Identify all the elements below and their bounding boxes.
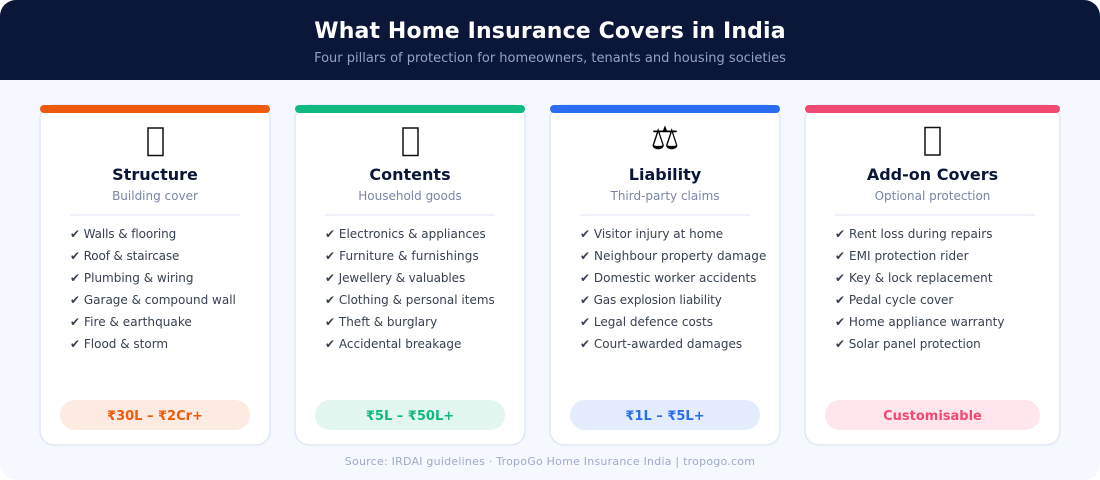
list: structure items: ✔ Garage & compound wall — [70, 293, 236, 307]
list: add-on items: ✔ Home appliance warranty — [835, 315, 1004, 329]
subheading: Third-party claims: Third-party claims — [610, 189, 720, 203]
badge: liability range: ₹1L – ₹5L+ — [625, 409, 705, 424]
list: contents items: ✔ Clothing & personal items — [325, 293, 495, 307]
list: contents items — [325, 227, 495, 351]
list: structure items: ✔ Walls & flooring — [70, 227, 176, 241]
panel: Liability — [549, 104, 781, 446]
subheading: Optional protection: Optional protection — [875, 189, 990, 203]
panel: Add-on Covers — [804, 104, 1061, 446]
list: liability items — [580, 227, 766, 351]
badge: contents range — [315, 400, 505, 430]
list: structure items: ✔ Roof & staircase — [70, 249, 179, 263]
list: contents items: ✔ Electronics & appliances — [325, 227, 486, 241]
list: contents items: ✔ Theft & burglary — [325, 315, 437, 329]
list: contents items: ✔ Furniture & furnishings — [325, 249, 479, 263]
list: liability items: ✔ Gas explosion liability — [580, 293, 722, 307]
list: add-on items: ✔ Solar panel protection — [835, 337, 981, 351]
heading: Liability: Liability — [629, 165, 701, 184]
icon: missing-glyph box — [147, 127, 164, 156]
list: liability items: ✔ Visitor injury at home — [580, 227, 723, 241]
badge: add-on: Customisable — [883, 409, 982, 424]
list: contents items: ✔ Accidental breakage — [325, 337, 461, 351]
list: structure items: ✔ Fire & earthquake — [70, 315, 192, 329]
badge: contents range: ₹5L – ₹50L+ — [366, 409, 454, 424]
list: add-on items: ✔ Pedal cycle cover — [835, 293, 953, 307]
list: contents items: ✔ Jewellery & valuables — [325, 271, 465, 285]
list: structure items: ✔ Flood & storm — [70, 337, 168, 351]
badge: structure range: ₹30L – ₹2Cr+ — [107, 409, 203, 424]
header banner — [0, 0, 1100, 80]
list: liability items: ✔ Legal defence costs — [580, 315, 713, 329]
source footer: Source: IRDAI guidelines · TropoGo Home Insurance India | tropogo.com — [345, 455, 755, 468]
list: liability items: ✔ Neighbour property damage — [580, 249, 766, 263]
subtitle: Four pillars of protection for homeowners, tenants and housing societies — [314, 51, 786, 66]
list: add-on items: ✔ Rent loss during repairs — [835, 227, 993, 241]
list: liability items: ✔ Court-awarded damages — [580, 337, 742, 351]
panel: Structure — [39, 104, 271, 446]
icon: missing-glyph box — [402, 127, 419, 156]
list: add-on items: ✔ Key & lock replacement — [835, 271, 993, 285]
panel: Contents — [294, 104, 526, 446]
subheading: Building cover: Building cover — [112, 189, 198, 203]
list: structure items — [70, 227, 236, 351]
heading: Structure: Structure — [112, 165, 198, 184]
subheading: Household goods: Household goods — [358, 189, 462, 203]
icon: missing-glyph box — [924, 126, 941, 156]
list: add-on items: ✔ EMI protection rider — [835, 249, 969, 263]
badge: liability range — [570, 400, 760, 430]
list: liability items: ✔ Domestic worker accidents — [580, 271, 756, 285]
list: structure items: ✔ Plumbing & wiring — [70, 271, 194, 285]
list: add-on items — [835, 227, 1004, 351]
title: What Home Insurance Covers in India — [314, 19, 786, 44]
icon: scales: ⚖ — [651, 119, 679, 157]
heading: Add-on Covers: Add-on Covers — [867, 165, 998, 184]
badge: add-on — [825, 400, 1040, 430]
heading: Contents: Contents — [369, 165, 451, 184]
badge: structure range — [60, 400, 250, 430]
